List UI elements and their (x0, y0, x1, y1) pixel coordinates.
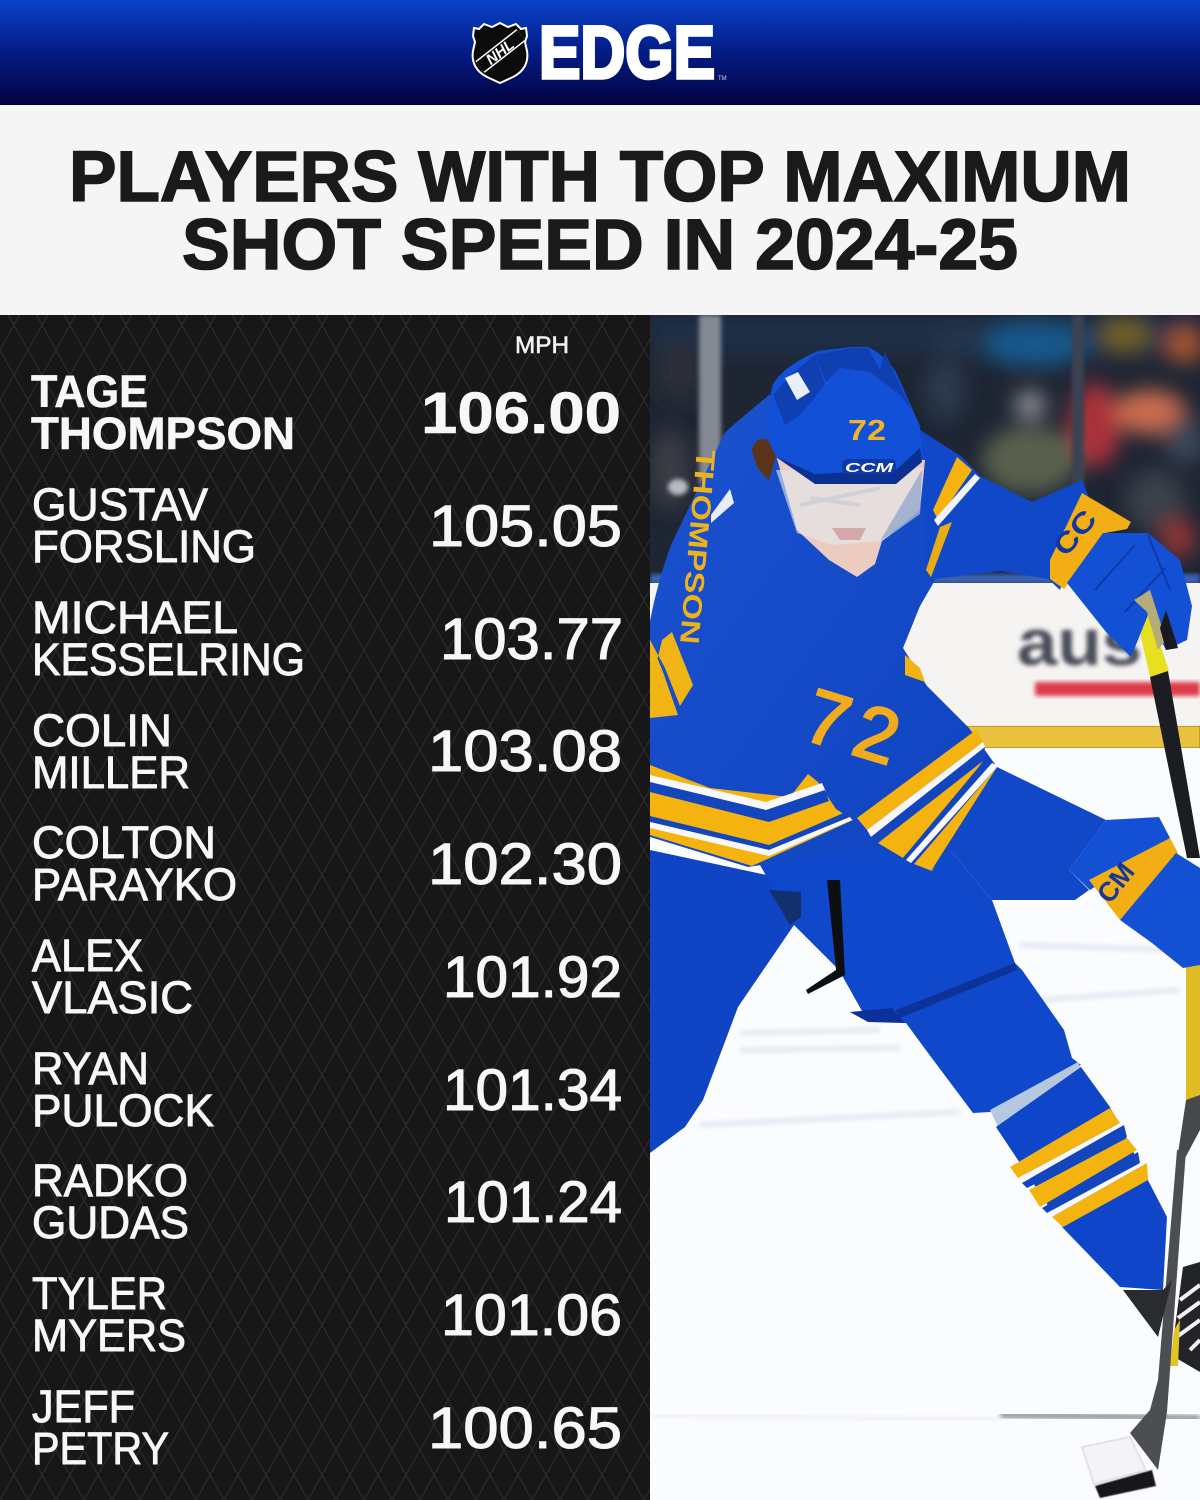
panel: player photo illustration (650, 315, 1200, 1500)
row: Tyler Myers 101.06 (32, 1268, 622, 1361)
row: Ryan Pulock 101.34: RYAN (32, 1043, 149, 1094)
title: PLAYERS WITH TOP MAXIMUM (69, 138, 1131, 217)
EDGE wordmark: EDGE (539, 11, 715, 94)
row: Jeff Petry 100.65: JEFF (32, 1381, 135, 1432)
player: forearm and lower glove (931, 767, 1200, 968)
row: Colin Miller 103.08: MILLER (32, 747, 190, 798)
row: Jeff Petry 100.65: PETRY (32, 1423, 169, 1474)
row: Tage Thompson 106.00: THOMPSON (31, 408, 295, 459)
player: shorts and near leg (760, 845, 1167, 1290)
row: Radko Gudas 101.24 (32, 1155, 622, 1248)
panel: leaderboard (0, 315, 650, 1500)
rink background (650, 315, 1200, 1500)
row: Jeff Petry 100.65: 100.65 (428, 1396, 622, 1461)
far skate (1170, 1262, 1200, 1372)
row: Tyler Myers 101.06: MYERS (32, 1310, 186, 1361)
hem stripes (650, 765, 853, 866)
row: Colin Miller 103.08: COLIN (32, 705, 172, 756)
back number fragment (650, 632, 693, 706)
title panel (0, 105, 1200, 315)
header band (0, 0, 1200, 105)
row: Michael Kesselring 103.77 (32, 592, 623, 685)
row: Alex Vlasic 101.92: ALEX (32, 930, 143, 981)
row: Radko Gudas 101.24: GUDAS (32, 1197, 189, 1248)
jersey number 72: 72 (795, 673, 918, 784)
player: skate (1123, 1280, 1172, 1337)
icon: NHL shield logo (473, 23, 527, 83)
row: Michael Kesselring 103.77: 103.77 (440, 607, 623, 672)
row: Alex Vlasic 101.92: 101.92 (443, 945, 622, 1010)
row: Tage Thompson 106.00 (31, 366, 621, 459)
row: Colin Miller 103.08 (32, 705, 622, 798)
row: Tage Thompson 106.00: 106.00 (421, 381, 621, 446)
row: Radko Gudas 101.24: RADKO (32, 1155, 188, 1206)
row: Ryan Pulock 101.34: PULOCK (32, 1085, 214, 1136)
row: Radko Gudas 101.24: 101.24 (444, 1170, 622, 1235)
player: jersey torso (650, 395, 997, 867)
player: helmet (769, 347, 922, 484)
row: Gustav Forsling 105.05: GUSTAV (32, 479, 208, 530)
row: Tage Thompson 106.00: TAGE (31, 366, 148, 417)
player: far leg (650, 850, 794, 1153)
row: Colton Parayko 102.30 (32, 817, 622, 910)
row: Colton Parayko 102.30: 102.30 (428, 832, 622, 897)
player: upper arm and glove: CC (1047, 504, 1103, 562)
row: Gustav Forsling 105.05: FORSLING (32, 521, 256, 572)
adidas mark (711, 489, 734, 523)
name on back: THOMPSON (674, 448, 721, 645)
row: Jeff Petry 100.65 (32, 1381, 622, 1474)
row: Ryan Pulock 101.34 (32, 1043, 622, 1136)
row: Colton Parayko 102.30: PARAYKO (32, 859, 237, 910)
EDGE wordmark: TM (718, 76, 727, 82)
player: face and visor (752, 439, 925, 577)
title: SHOT SPEED IN 2024-25 (182, 206, 1018, 285)
player: sleeve stripes (857, 730, 998, 871)
row: Gustav Forsling 105.05 (32, 479, 622, 572)
row: Michael Kesselring 103.77: KESSELRING (32, 634, 305, 685)
row: Colton Parayko 102.30: COLTON (32, 817, 216, 868)
player: upper arm and glove (920, 430, 1192, 657)
hockey stick (1082, 602, 1200, 1498)
row: Ryan Pulock 101.34: 101.34 (443, 1058, 622, 1123)
row: Gustav Forsling 105.05: 105.05 (429, 494, 622, 559)
column label: MPH: MPH (515, 332, 569, 359)
row: Alex Vlasic 101.92 (32, 930, 622, 1023)
row: Michael Kesselring 103.77: MICHAEL (32, 592, 238, 643)
icon: NHL shield logo: NHL (483, 36, 518, 69)
row: Alex Vlasic 101.92: VLASIC (32, 972, 193, 1023)
rink background: aus (1017, 605, 1142, 679)
title (69, 138, 1131, 285)
player: helmet: 72 (848, 415, 886, 447)
row: Tyler Myers 101.06: 101.06 (441, 1283, 622, 1348)
row: Tyler Myers 101.06: TYLER (32, 1268, 167, 1319)
row: Colin Miller 103.08: 103.08 (428, 719, 622, 784)
player: forearm and lower glove: CM (1091, 857, 1141, 909)
player: helmet: CCM (845, 460, 895, 475)
